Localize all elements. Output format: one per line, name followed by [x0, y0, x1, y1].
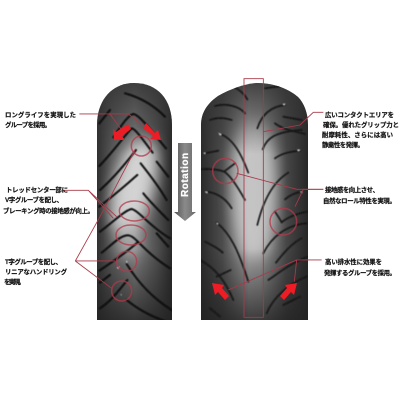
text: contact area: 広いコンタクトエリアを: [325, 110, 394, 119]
red arrows: drainage grooves: [212, 283, 297, 300]
highlight circles left: [112, 136, 151, 301]
text: tread center: トレッドセンター部に: [6, 185, 68, 194]
tread grooves right: [200, 86, 308, 317]
callout lines: right tire: [213, 79, 323, 317]
rotation arrow: [174, 143, 196, 221]
highlight circles right: [213, 158, 238, 184]
text: contact area: 確保。優れたグリップ力と: [323, 120, 399, 129]
left tire: [97, 83, 172, 323]
text: tread center: ブレーキング時の接地感が向上。: [3, 206, 94, 215]
text: T groove: [4, 257, 68, 286]
callout lines: left tire: [63, 114, 151, 301]
text: T groove: T字グルーブを配し、: [5, 257, 62, 266]
text: drainage: 高い排水性に効果を: [325, 257, 382, 266]
text: long life: [5, 110, 76, 129]
text: roll: 自然なロール特性を実現。: [323, 196, 396, 205]
text: tread center: [3, 185, 94, 215]
text: roll: [323, 185, 396, 205]
right tire: [200, 83, 308, 320]
text: T groove: リニアなハンドリング: [5, 267, 68, 276]
text: long life: ロングライフを実現した: [5, 110, 76, 119]
text: long life: グループを採用。: [5, 120, 51, 129]
rotation arrow: Rotation: [180, 152, 191, 197]
text: drainage: [324, 257, 396, 277]
text: drainage: 発揮するグルーブを採用。: [324, 268, 396, 277]
text: contact area: 耐摩耗性、さらには高い: [322, 130, 394, 139]
text: tread center: V字グルーブを配し、: [5, 195, 63, 204]
text: roll: 接地感を向上させ、: [325, 185, 379, 194]
text: contact area: 静粛性を発揮。: [322, 140, 364, 149]
red arrows: long life grooves: [113, 123, 161, 140]
text: contact area: [322, 110, 399, 149]
text: T groove: を実現。: [4, 277, 25, 286]
tread grooves left: [99, 93, 172, 323]
